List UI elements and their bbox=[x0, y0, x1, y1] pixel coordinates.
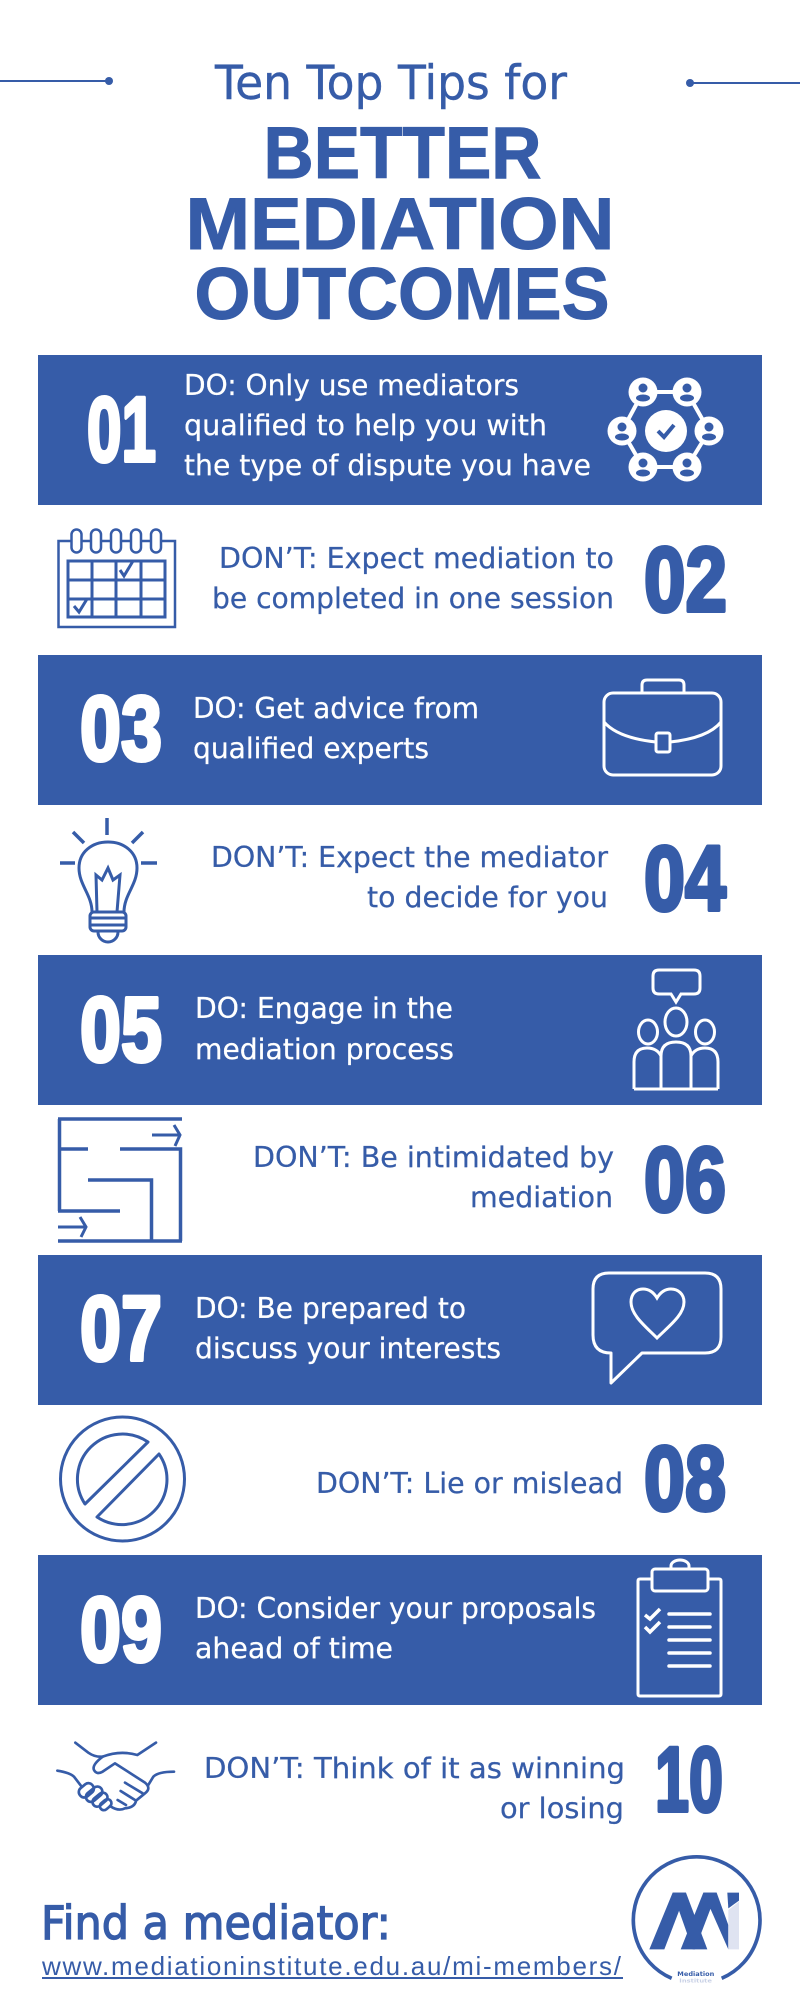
number 03: 03 bbox=[80, 678, 162, 780]
text: tip 02 bbox=[212, 542, 614, 615]
text: tip 06 bbox=[253, 1141, 614, 1214]
number 10: 10 bbox=[655, 1729, 723, 1831]
logo: Mediation Institute: Institute bbox=[679, 1978, 712, 1984]
number 01: 01 bbox=[87, 379, 156, 481]
icon: network of people bbox=[608, 378, 724, 482]
icon: speech bubble with heart bbox=[593, 1273, 721, 1383]
tip 08 bbox=[60, 1417, 726, 1541]
footer: find a mediator bbox=[41, 1896, 623, 1981]
number 06: 06 bbox=[644, 1129, 726, 1231]
title: OUTCOMES bbox=[194, 254, 610, 335]
text: tip 07: DO: Be prepared to bbox=[195, 1292, 466, 1325]
tip 10 bbox=[57, 1729, 723, 1831]
footer: find a mediator: Find a mediator: bbox=[41, 1896, 391, 1950]
icon: light bulb bbox=[60, 818, 157, 942]
number 07: 07 bbox=[80, 1278, 162, 1380]
text: tip 03: DO: Get advice from bbox=[193, 692, 479, 725]
title bbox=[186, 56, 614, 335]
text: tip 07 bbox=[195, 1292, 501, 1365]
icon: handshake bbox=[57, 1743, 174, 1812]
text: tip 09: DO: Consider your proposals bbox=[195, 1592, 596, 1625]
text: tip 01: the type of dispute you have bbox=[184, 449, 591, 482]
icon: calendar bbox=[58, 530, 175, 627]
panel: tip 05 bbox=[38, 955, 762, 1105]
text: tip 03: qualified experts bbox=[193, 732, 429, 765]
text: tip 06: DON’T: Be intimidated by bbox=[253, 1141, 614, 1174]
text: tip 04: DON’T: Expect the mediator bbox=[211, 841, 608, 874]
title: BETTER bbox=[264, 113, 542, 194]
text: tip 05 bbox=[195, 992, 454, 1066]
text: tip 02: be completed in one session bbox=[212, 582, 614, 615]
text: tip 09: ahead of time bbox=[195, 1632, 393, 1665]
text: tip 03 bbox=[193, 692, 479, 765]
icon: briefcase bbox=[604, 680, 721, 775]
panel: tip 07 bbox=[38, 1255, 762, 1405]
number 09: 09 bbox=[80, 1579, 162, 1681]
text: tip 02: DON’T: Expect mediation to bbox=[219, 542, 614, 575]
icon: clipboard checklist bbox=[638, 1560, 721, 1696]
text: tip 10: DON’T: Think of it as winning bbox=[204, 1752, 625, 1785]
number 05: 05 bbox=[80, 979, 162, 1081]
panel: tip 03 bbox=[38, 655, 762, 805]
title: Ten Top Tips for bbox=[214, 56, 568, 111]
text: tip 01: qualified to help you with bbox=[184, 409, 547, 442]
tip 04 bbox=[60, 818, 726, 942]
text: tip 09 bbox=[195, 1592, 596, 1665]
logo: Mediation Institute bbox=[633, 1857, 760, 1984]
number 04: 04 bbox=[644, 828, 726, 930]
text: tip 10: or losing bbox=[500, 1792, 624, 1825]
tip 02 bbox=[58, 529, 727, 631]
left decorative line bbox=[0, 77, 113, 85]
title: MEDIATION bbox=[186, 184, 614, 265]
text: tip 01: DO: Only use mediators bbox=[184, 369, 519, 402]
text: tip 05: DO: Engage in the bbox=[195, 992, 453, 1025]
link url: www.mediationinstitute.edu.au/mi-members/ bbox=[41, 1951, 622, 1981]
tip 06 bbox=[58, 1119, 726, 1241]
icon: maze bbox=[58, 1119, 182, 1241]
text: tip 04: to decide for you bbox=[367, 881, 608, 914]
icon: prohibited sign bbox=[60, 1417, 184, 1541]
right decorative line bbox=[686, 79, 800, 87]
text: tip 07: discuss your interests bbox=[195, 1332, 501, 1365]
panel: tip 01 bbox=[38, 355, 762, 505]
text: tip 06: mediation bbox=[470, 1181, 613, 1214]
panel: tip 09 bbox=[38, 1555, 762, 1705]
text: tip 05: mediation process bbox=[195, 1033, 454, 1066]
number 02: 02 bbox=[644, 529, 727, 631]
logo: Mediation Institute: Mediation bbox=[677, 1971, 714, 1978]
number 08: 08 bbox=[644, 1428, 726, 1530]
text: tip 01 bbox=[184, 369, 591, 482]
text: tip 04 bbox=[211, 841, 608, 914]
text: tip 10 bbox=[204, 1752, 625, 1825]
icon: group with speech bubble bbox=[634, 970, 718, 1089]
text: tip 08: DON’T: Lie or mislead bbox=[316, 1467, 623, 1500]
